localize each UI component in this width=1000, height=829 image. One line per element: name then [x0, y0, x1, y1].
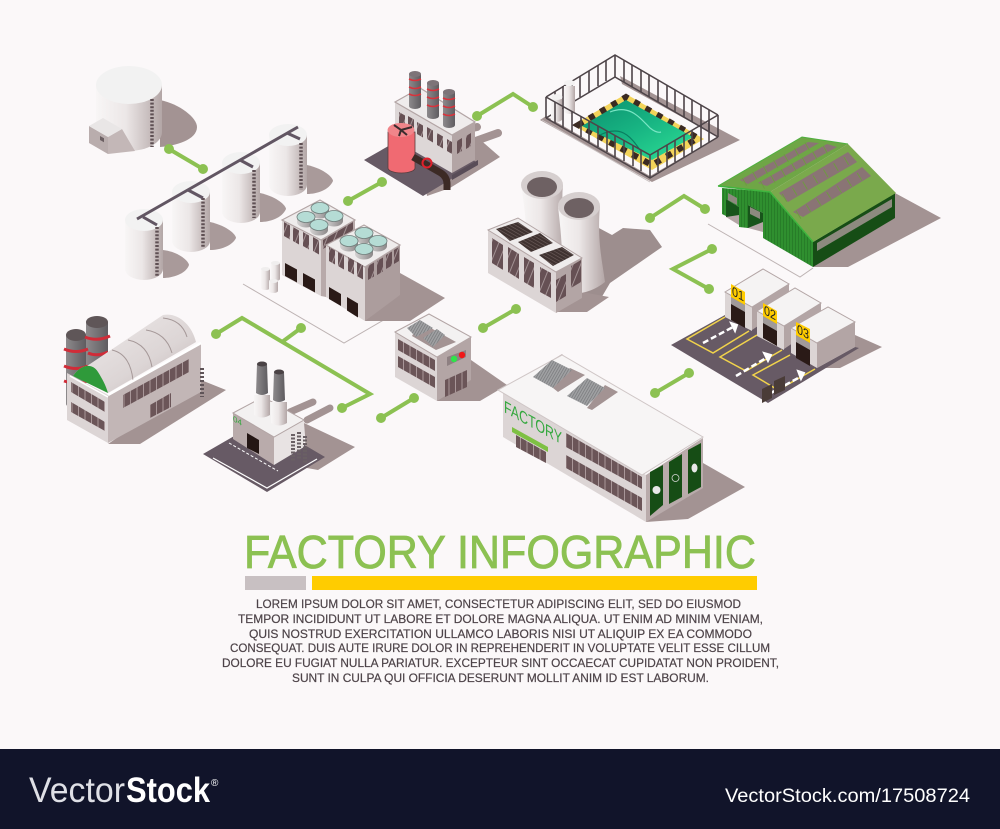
- connector: hall to small factory branch: [211, 318, 370, 413]
- small factory 04: 04: [233, 414, 242, 428]
- barrel-roof hall with chimneys: [64, 315, 226, 444]
- connector: power plant to fan building: [343, 177, 387, 206]
- title bar: grey: [245, 576, 306, 590]
- green warehouse with solar roof: [708, 137, 941, 277]
- connector: power plant to fenced pool: [472, 94, 538, 121]
- row of four silos with pipe: [125, 124, 333, 280]
- control building with traffic lights: [395, 314, 507, 401]
- fenced green pool: [540, 55, 740, 182]
- main factory building: [498, 354, 745, 522]
- rooftop fans: [297, 202, 387, 260]
- fan cooling building: [243, 200, 445, 343]
- small factory 04: [203, 362, 355, 492]
- connector: warehouse to loading docks: [673, 244, 717, 294]
- storage tank with annex: [89, 66, 197, 154]
- footer band: ®: [211, 778, 219, 789]
- footer band: [0, 749, 1000, 829]
- body text: QUIS NOSTRUD EXERCITATION ULLAMCO LABORIS NISI UT ALIQUIP EX EA COMMODO: [249, 627, 752, 641]
- cooling towers plant: [488, 171, 662, 313]
- connector: tank to silos: [164, 144, 208, 174]
- body text: DOLORE EU FUGIAT NULLA PARIATUR. EXCEPTEUR SINT OCCAECAT CUPIDATAT NON PROIDENT,: [222, 656, 779, 670]
- connector: factory to loading docks: [650, 368, 694, 398]
- body text: CONSEQUAT. DUIS AUTE IRURE DOLOR IN REPREHENDERIT IN VOLUPTATE VELIT ESSE CILLUM: [230, 641, 770, 655]
- power plant with red tank: [364, 71, 500, 196]
- connector: cooling plant to warehouse: [645, 196, 710, 223]
- dock number signs: 02: [764, 302, 776, 323]
- body text: SUNT IN CULPA QUI OFFICIA DESERUNT MOLLIT ANIM ID EST LABORUM.: [292, 671, 709, 685]
- FACTORY wall sign: FACTORY: [504, 396, 562, 448]
- title: FACTORY INFOGRAPHIC: [244, 526, 756, 578]
- dock number signs: [731, 283, 810, 343]
- body text: TEMPOR INCIDIDUNT UT LABORE ET DOLORE MAGNA ALIQUA. UT ENIM AD MINIM VENIAM,: [238, 612, 763, 626]
- footer band: VectorStock.com/17508724: [725, 786, 970, 807]
- connector: mid building to cooling plant: [478, 304, 521, 333]
- dock number signs: 01: [732, 283, 744, 304]
- connector: small factory to control building: [376, 393, 419, 423]
- loading docks with parking: [671, 269, 882, 403]
- dock number signs: 03: [797, 321, 809, 342]
- footer band: Vector: [29, 771, 125, 810]
- body text: LOREM IPSUM DOLOR SIT AMET, CONSECTETUR ADIPISCING ELIT, SED DO EIUSMOD: [256, 597, 741, 611]
- body text: [222, 597, 779, 685]
- title bar: yellow: [312, 576, 757, 590]
- small gas cylinders: [261, 261, 280, 293]
- footer band: Stock: [126, 771, 210, 810]
